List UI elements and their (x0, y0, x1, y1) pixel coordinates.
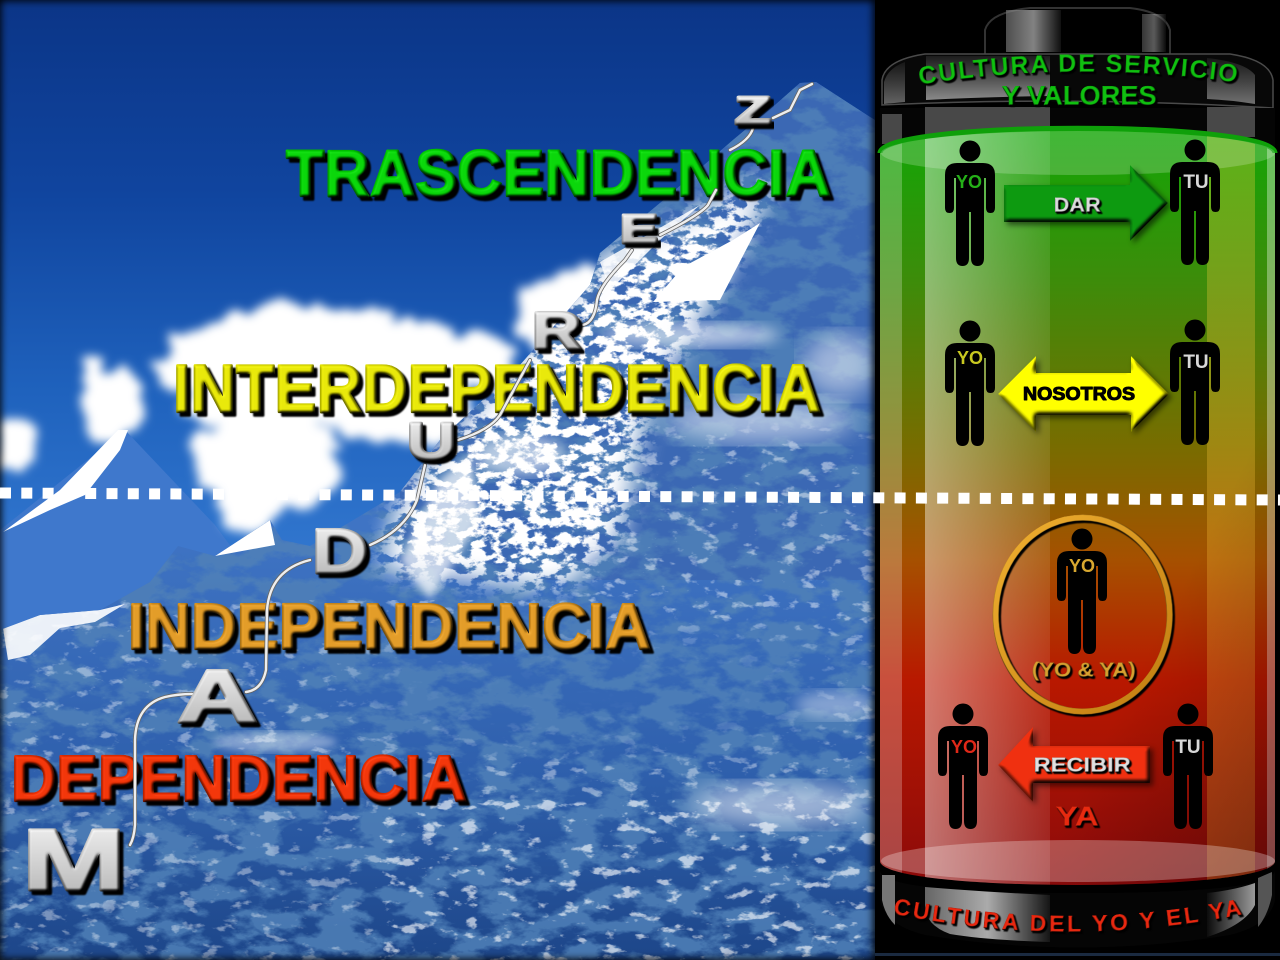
arrow recibir: RECIBIR (1034, 755, 1132, 777)
group: dar (945, 140, 1220, 266)
label: y valores: Y VALORES (1002, 81, 1157, 111)
panel background (875, 0, 1280, 960)
clouds (155, 267, 633, 535)
liquid body (880, 120, 1275, 900)
snow fields (368, 160, 790, 608)
bright high-altitude haze (665, 398, 855, 442)
person tu: TU (1183, 172, 1209, 193)
glass collar (880, 107, 1275, 153)
label: cultura del yo y el ya: CULTURA DEL YO Y EL YA (894, 899, 1244, 934)
low clouds (213, 732, 337, 752)
back peak (0, 430, 300, 640)
label ya: YA (1056, 801, 1099, 832)
panel: culture battery (875, 7, 1280, 956)
heading: independencia: INDEPENDENCIA (128, 590, 651, 663)
person tu (1163, 704, 1213, 829)
letter Z: Z (735, 90, 771, 133)
heading: trascendencia: TRASCENDENCIA (286, 136, 831, 210)
bottom cap (880, 870, 1275, 948)
dotted divider line (0, 493, 1280, 500)
word madurez climbing letters (22, 90, 771, 909)
liquid surface top (880, 128, 1275, 175)
climbing route line (130, 84, 812, 845)
group: nosotros (945, 320, 1220, 446)
glass column highlights (880, 120, 902, 900)
gold ring (996, 518, 1170, 712)
sky (0, 0, 875, 560)
person yo (945, 320, 995, 446)
heading: interdependencia: INTERDEPENDENCIA (173, 351, 821, 427)
person yo (938, 704, 988, 829)
person yo: YO (951, 737, 977, 757)
liquid surface bottom (881, 840, 1275, 882)
person yo: YO (957, 348, 983, 368)
top small cap (985, 8, 1170, 55)
main mountain mass (0, 0, 878, 960)
person yo (945, 140, 995, 266)
arrow dar: DAR (1054, 195, 1102, 217)
bottom strip (875, 953, 1280, 956)
arrow recibir (998, 727, 1150, 802)
white ridge of the back peak (3, 430, 128, 532)
dark vignette edge (0, 0, 877, 960)
label: cultura de servicio: CULTURA DE SERVICIO (919, 54, 1240, 87)
double arrow nosotros (998, 356, 1169, 432)
label yo and ya: (YO & YA) (1032, 660, 1136, 682)
arrow dar (1004, 165, 1168, 241)
double arrow nosotros: NOSOTROS (1023, 384, 1135, 404)
letter R: R (532, 302, 581, 361)
person tu: TU (1175, 737, 1201, 758)
letter D: D (312, 517, 368, 587)
clouds behind peak (0, 355, 142, 473)
group: yo and ya (996, 518, 1170, 712)
top big cap (882, 54, 1273, 108)
person yo: YO (1069, 556, 1095, 576)
person tu (1170, 140, 1220, 265)
heading: dependencia: DEPENDENCIA (11, 742, 467, 815)
person yo: YO (956, 172, 982, 192)
group: recibir (938, 704, 1213, 832)
letter A: A (177, 654, 258, 738)
letter U: U (407, 413, 456, 471)
person yo (1057, 528, 1107, 654)
letter M: M (22, 812, 126, 909)
person tu (1170, 320, 1220, 445)
person tu: TU (1183, 352, 1209, 373)
letter E: E (620, 206, 658, 252)
background: mountain photograph (0, 0, 878, 960)
